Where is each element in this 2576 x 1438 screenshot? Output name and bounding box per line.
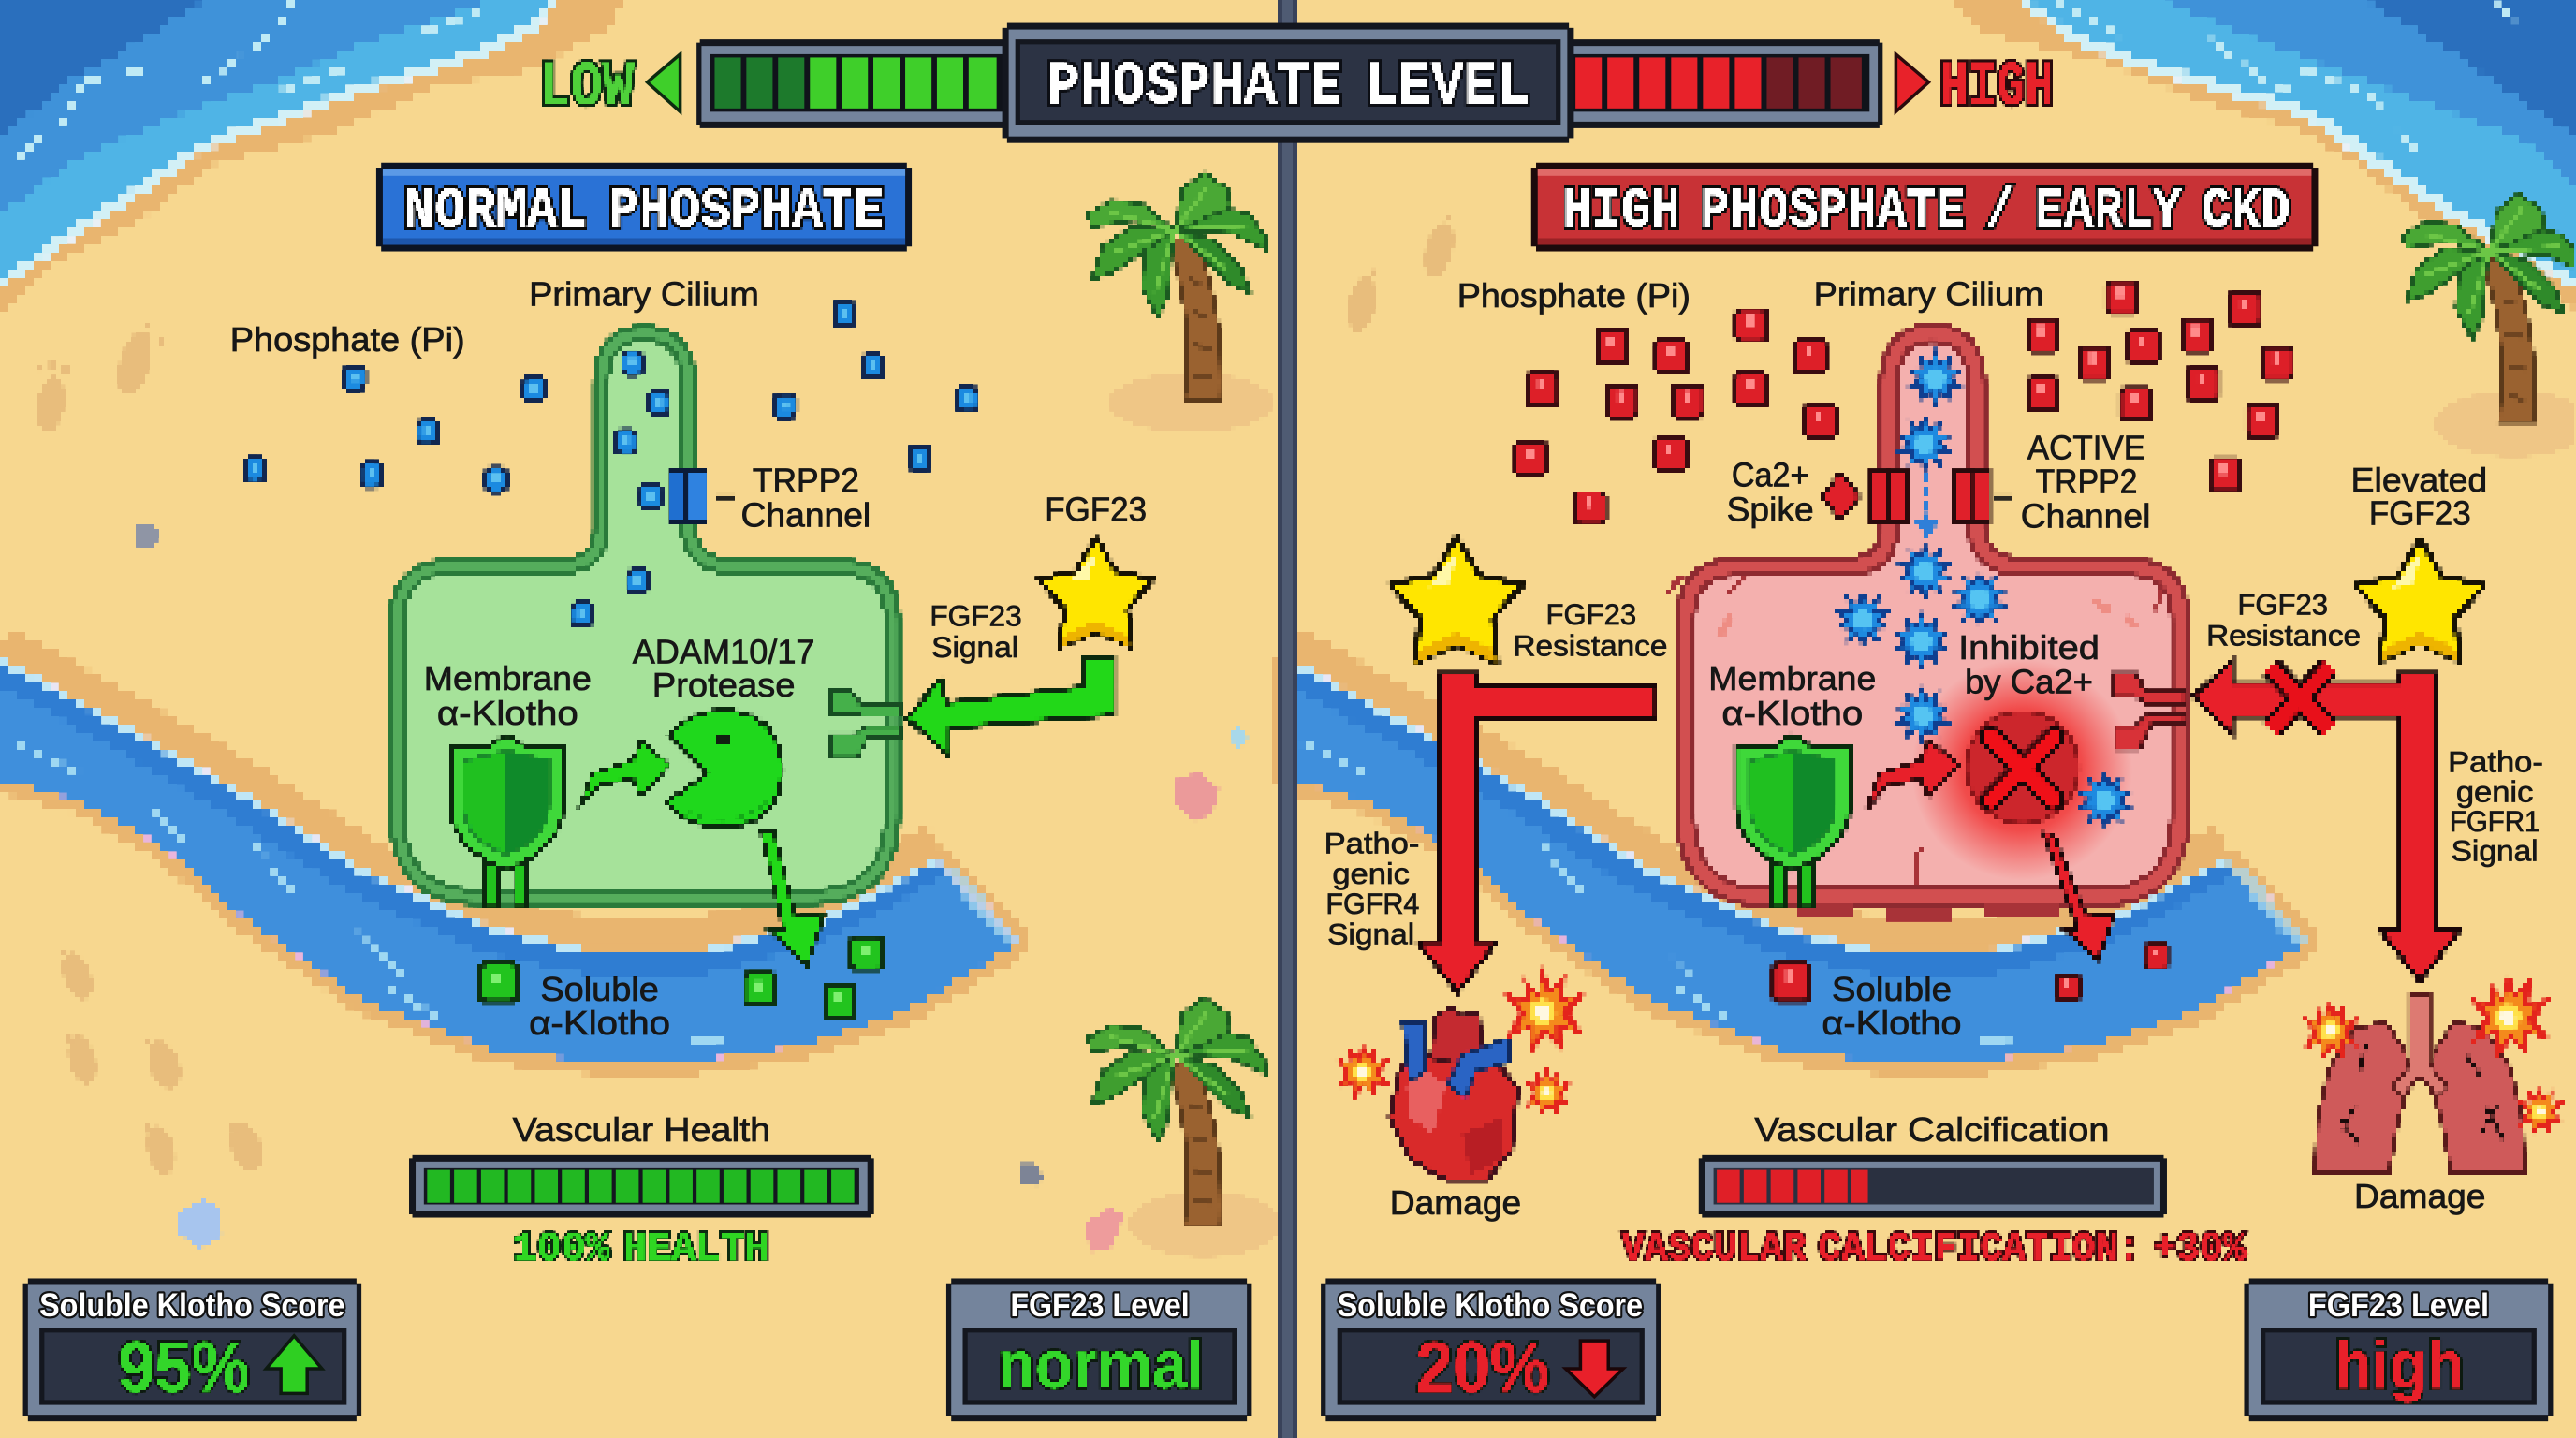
value: normal: normal [997, 1326, 1204, 1403]
label: active TRPP2 channel [2021, 429, 2150, 535]
label: ADAM10/17 protease: ADAM10/17 [633, 632, 815, 670]
label: pathogenic FGFR4 signal: genic [1332, 857, 1410, 890]
palm tree right [2402, 194, 2576, 422]
label: pathogenic FGFR1 signal: Patho- [2448, 744, 2543, 778]
icon: ADAM protease pac-man [667, 710, 782, 827]
soluble klotho squares [478, 935, 884, 1019]
banner: phosphate level frame [1003, 23, 1573, 143]
icon: damage flames at heart [1335, 966, 1586, 1118]
label: pathogenic FGFR1 signal: Signal [2452, 834, 2539, 868]
heading: normal phosphate: NORMAL PHOSPHATE [404, 180, 884, 244]
icon: membrane klotho shield [450, 735, 564, 907]
heading: high phosphate / early CKD: HIGH PHOSPHATE / EARLY CKD [1562, 180, 2291, 244]
palm shadows [1109, 373, 2576, 1257]
label: pathogenic FGFR1 signal: genic [2456, 774, 2533, 808]
value: 95%: 95% [118, 1328, 250, 1408]
label: elevated FGF23 [2351, 461, 2487, 533]
score title: soluble klotho right: Soluble Klotho Score [1338, 1287, 1643, 1324]
label: soluble klotho left: α-Klotho [529, 1004, 670, 1042]
label: low: LOW [539, 52, 634, 124]
label: pathogenic FGFR4 signal: Patho- [1325, 827, 1419, 860]
palm tree top-left [1088, 172, 1266, 401]
label: soluble klotho right [1822, 970, 1962, 1042]
label: phosphate right: Phosphate (Pi) [1457, 276, 1690, 315]
icon: membrane klotho shield [1736, 735, 1850, 907]
label: TRPP2 channel left [741, 462, 871, 535]
arrow: pathogenic FGFR1 signal and blocked path [2193, 661, 2461, 981]
icon: up arrow [266, 1336, 322, 1393]
river right [1288, 651, 2310, 1064]
arrow: pathogenic FGFR4 signal [1418, 674, 1656, 992]
palm tree bottom-left [1088, 997, 1266, 1225]
status: vascular calcification +30%: VASCULAR CALCIFICATION: +30% [1621, 1225, 2247, 1272]
icon: damaged lungs [2315, 994, 2525, 1173]
label: TRPP2 channel left: Channel [741, 496, 871, 535]
label: membrane klotho right [1708, 659, 1876, 732]
label: pathogenic FGFR4 signal: FGFR4 [1325, 887, 1419, 920]
beach scenery: ocean and river [0, 0, 2576, 1064]
chart: vascular health bar [409, 1155, 874, 1218]
label: elevated FGF23: Elevated [2351, 461, 2487, 499]
arrow: klotho to protease [579, 740, 669, 809]
label: TRPP2 channel left: TRPP2 [753, 462, 859, 500]
icon: down arrow [1566, 1341, 1623, 1397]
label: inhibited by calcium: by Ca2+ [1965, 663, 2093, 701]
dash to channel label [1995, 494, 2014, 499]
label: membrane klotho left: α-Klotho [437, 694, 578, 732]
label: vascular health: Vascular Health [513, 1110, 770, 1149]
label: primary cilium left: Primary Cilium [529, 274, 759, 313]
label: pathogenic FGFR1 signal [2448, 744, 2543, 868]
panel: normal phosphate diagram artwork [242, 300, 1153, 1019]
label: FGF23 resistance left: FGF23 [1546, 597, 1636, 631]
label: FGF23 resistance left [1513, 597, 1667, 662]
river left [0, 651, 1022, 1064]
label: ADAM10/17 protease: Protease [652, 666, 795, 704]
label: lung damage: Damage [2354, 1177, 2485, 1215]
icon: broken FGF receptor [2115, 674, 2185, 749]
calcium ions [1838, 352, 2130, 827]
label: primary cilium right: Primary Cilium [1814, 274, 2043, 313]
label: calcium spike: Ca2+ [1732, 456, 1808, 494]
text labels [39, 274, 2543, 1324]
triangle: low marker [648, 54, 681, 111]
title: phosphate level: PHOSPHATE LEVEL [1046, 53, 1530, 122]
arrow: calcium influx [1915, 473, 1939, 539]
score title: FGF23 right: FGF23 Level [2308, 1287, 2489, 1324]
score box frame: FGF23 high [2244, 1278, 2553, 1421]
cell: damaged red cell with primary cilium [1666, 333, 2180, 914]
gauge: low side phosphate level [696, 39, 1012, 128]
red phosphate particles [1514, 279, 2295, 526]
arrow: shed klotho downwards [761, 829, 825, 966]
label: active TRPP2 channel: Channel [2021, 496, 2150, 535]
icon: damaged heart [1390, 1007, 1518, 1180]
score box frame: soluble klotho high [1321, 1278, 1661, 1421]
score title: soluble klotho left: Soluble Klotho Score [39, 1287, 345, 1324]
label: vascular calcification: Vascular Calcification [1754, 1110, 2110, 1149]
label: FGF23 resistance right: Resistance [2206, 619, 2361, 653]
centre divider [1278, 0, 1297, 1438]
icon: elevated FGF23 star left [1390, 536, 1523, 663]
label: membrane klotho right: α-Klotho [1721, 694, 1863, 732]
label: calcium spike [1727, 456, 1814, 528]
icon: damage flames at lungs [2301, 971, 2565, 1137]
arrow: FGF23 signal [907, 657, 1114, 756]
label: pathogenic FGFR4 signal: Signal [1327, 917, 1414, 950]
panel: high phosphate cell [1666, 333, 2180, 914]
label: FGF23 signal: FGF23 [929, 599, 1022, 633]
triangle: high marker [1895, 54, 1928, 111]
label: membrane klotho right: Membrane [1708, 659, 1876, 697]
label: high: HIGH [1940, 52, 2054, 124]
phosphate particles [242, 300, 980, 628]
value: 20%: 20% [1416, 1328, 1549, 1408]
label: pathogenic FGFR4 signal [1325, 827, 1419, 950]
icon: FGF receptor [831, 690, 900, 757]
label: ADAM10/17 protease [633, 632, 815, 704]
label: phosphate left: Phosphate (Pi) [230, 320, 465, 359]
label: soluble klotho right: α-Klotho [1822, 1004, 1962, 1042]
rocks and shells [135, 522, 1249, 1252]
score box frame: soluble klotho normal [23, 1278, 361, 1421]
value: high: high [2334, 1326, 2465, 1403]
label: elevated FGF23: FGF23 [2369, 494, 2471, 533]
label: heart damage: Damage [1390, 1183, 1521, 1222]
label: FGF23 resistance left: Resistance [1513, 628, 1667, 662]
gauge: high side phosphate level [1564, 39, 1882, 128]
ocean top-right [1954, 0, 2576, 309]
score box frame: FGF23 normal [946, 1278, 1251, 1421]
icon: FGF23 star [1038, 537, 1153, 647]
label: soluble klotho left: Soluble [540, 970, 659, 1008]
header frame: normal phosphate [376, 163, 912, 252]
arrow: reduced klotho shedding [2043, 833, 2115, 960]
icon: active TRPP2 channel [1871, 472, 1989, 522]
label: active TRPP2 channel: ACTIVE [2027, 429, 2145, 467]
header frame: high phosphate [1531, 163, 2318, 252]
label: FGF23 resistance right: FGF23 [2237, 587, 2328, 621]
icon: TRPP2 channel [668, 470, 736, 522]
footprints [34, 213, 1459, 1178]
label: inhibited by calcium: Inhibited [1958, 628, 2100, 667]
icon: elevated FGF23 star right [2356, 538, 2484, 661]
decorations: footprints, shells, rocks, palms [34, 172, 2576, 1257]
label: soluble klotho left [529, 970, 670, 1042]
soluble klotho squares [1771, 943, 2169, 1004]
icon: calcium spike marker [1822, 473, 1860, 520]
icon: inhibited protease with X [1967, 712, 2078, 823]
label: FGF23 signal: Signal [931, 630, 1018, 664]
label: inhibited by calcium [1958, 628, 2100, 701]
label: membrane klotho left: Membrane [424, 659, 592, 697]
label: FGF23: FGF23 [1045, 490, 1147, 528]
panel: high phosphate diagram artwork [1335, 279, 2565, 1180]
score title: FGF23 left: FGF23 Level [1010, 1287, 1190, 1324]
label: membrane klotho left [424, 659, 592, 732]
ocean top-left [0, 0, 624, 312]
cell: healthy green cell with primary cilium [398, 333, 892, 897]
glow around inhibited protease [1911, 659, 2132, 880]
arrow: klotho to inhibited protease [1867, 740, 1957, 809]
label: pathogenic FGFR1 signal: FGFR1 [2450, 804, 2539, 838]
label: active TRPP2 channel: TRPP2 [2036, 462, 2137, 501]
status: 100% health: 100% HEALTH [513, 1225, 768, 1272]
label: FGF23 resistance right [2206, 587, 2361, 653]
label: calcium spike: Spike [1727, 490, 1814, 528]
label: soluble klotho right: Soluble [1832, 970, 1952, 1008]
label: FGF23 signal [929, 599, 1022, 664]
chart: vascular calcification bar [1699, 1155, 2167, 1218]
